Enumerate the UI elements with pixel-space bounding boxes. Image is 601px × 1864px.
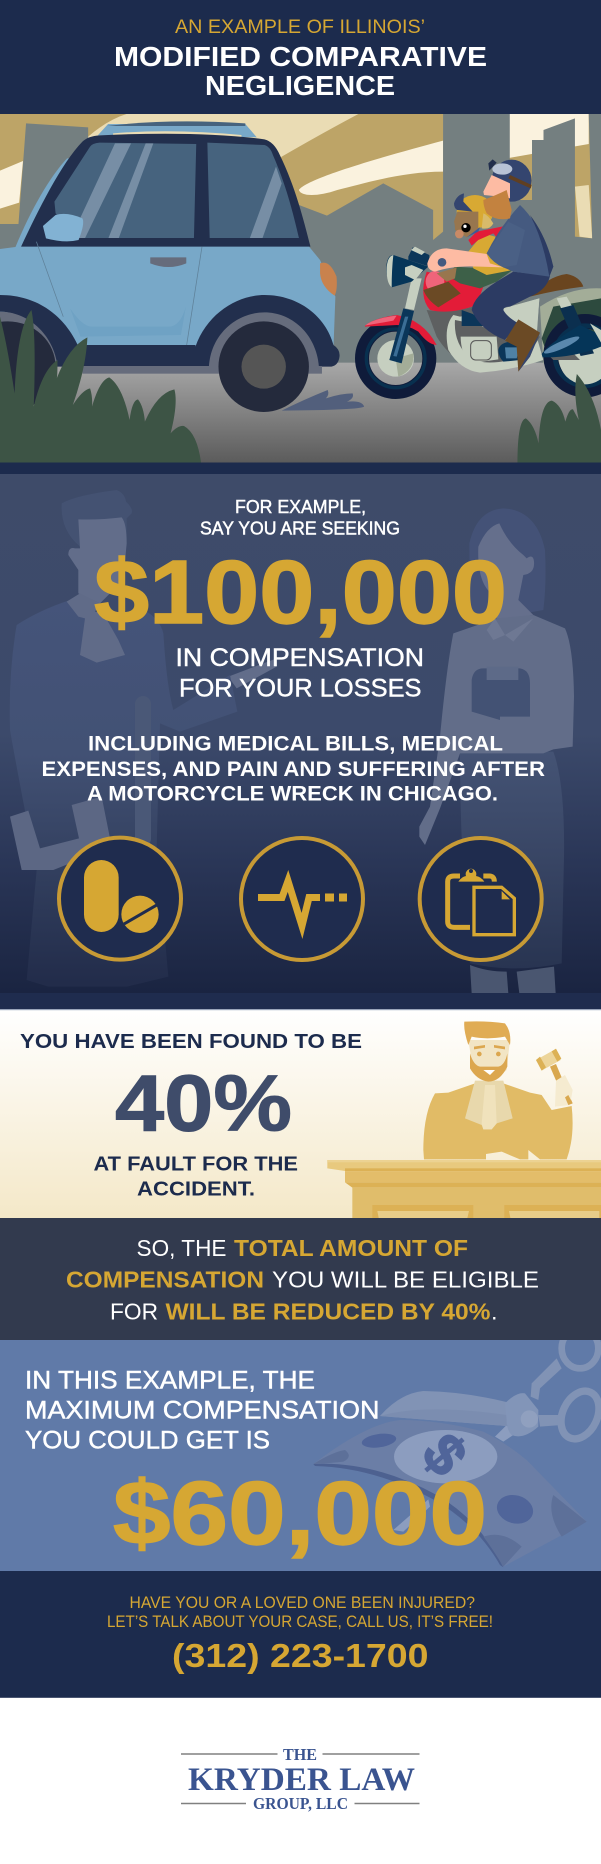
amount: $60,000	[113, 1464, 487, 1564]
reduction line 1: SO, THE	[136, 1235, 226, 1261]
bush right	[517, 374, 601, 464]
fault text top: YOU HAVE BEEN FOUND TO BE	[20, 1030, 362, 1053]
city background and road	[0, 114, 601, 463]
panel: compensation example	[0, 474, 601, 993]
header kicker: AN EXAMPLE OF ILLINOIS’	[175, 17, 425, 38]
icon: scissors cutting banknote	[313, 1328, 601, 1567]
judge illustration	[327, 1021, 601, 1221]
puddle	[282, 390, 364, 411]
icon: pulse	[241, 838, 363, 960]
motorcycle and riders	[362, 159, 601, 392]
details line 2: EXPENSES, AND PAIN AND SUFFERING AFTER	[42, 758, 545, 781]
panel: header	[0, 0, 601, 115]
icon: documents	[420, 838, 542, 960]
reduction line 2	[66, 1266, 539, 1292]
reduction line 1	[136, 1235, 468, 1261]
bush left	[0, 310, 201, 464]
logo rules	[181, 1754, 420, 1804]
logo: kryder law: KRYDER LAW	[188, 1762, 415, 1798]
panel: fault percentage	[0, 1009, 601, 1221]
amount: $100,000	[94, 543, 507, 643]
banknote dollar sign: $	[409, 1421, 480, 1488]
reduction line 1: TOTAL AMOUNT OF	[234, 1235, 468, 1261]
logo: group llc: GROUP, LLC	[253, 1794, 348, 1813]
car	[0, 121, 340, 412]
panel: maximum compensation	[0, 1328, 601, 1571]
reduction line 3: WILL BE REDUCED BY 40%	[166, 1298, 491, 1324]
cta line 2: LET’S TALK ABOUT YOUR CASE, CALL US, IT’S FREE!	[107, 1613, 493, 1631]
reduction line 2: COMPENSATION	[66, 1266, 264, 1292]
max text line 2: MAXIMUM COMPENSATION	[25, 1396, 379, 1424]
fault text line 2: ACCIDENT.	[137, 1178, 255, 1200]
panel: call to action	[0, 1571, 601, 1697]
reduction line 3: FOR	[110, 1298, 158, 1324]
intro text line 2: SAY YOU ARE SEEKING	[200, 518, 400, 538]
percentage: 40%	[115, 1058, 292, 1148]
cta line 1: HAVE YOU OR A LOVED ONE BEEN INJURED?	[130, 1594, 475, 1612]
compensation line 2: FOR YOUR LOSSES	[179, 674, 422, 702]
phone number: (312) 223-1700	[172, 1637, 428, 1674]
panel: road scene illustration	[0, 114, 601, 464]
reduction line 2: YOU WILL BE ELIGIBLE	[272, 1266, 539, 1292]
divider band	[0, 993, 601, 1010]
panel: logo footer	[0, 1697, 601, 1864]
medical professional silhouette	[419, 508, 574, 993]
max text line 1: IN THIS EXAMPLE, THE	[25, 1366, 315, 1394]
title line 2: NEGLIGENCE	[205, 70, 395, 101]
title line 1: MODIFIED COMPARATIVE	[114, 41, 487, 72]
judge bench	[327, 1160, 601, 1221]
icon: pills	[59, 838, 181, 960]
details line 3: A MOTORCYCLE WRECK IN CHICAGO.	[87, 782, 498, 806]
compensation line 1: IN COMPENSATION	[176, 644, 424, 672]
panel: reduction statement	[0, 1218, 601, 1340]
intro text: FOR EXAMPLE,	[235, 497, 366, 517]
reduction line 3: .	[491, 1298, 498, 1324]
lawyer silhouette	[10, 490, 277, 987]
max text line 3: YOU COULD GET IS	[25, 1426, 270, 1454]
logo: the: THE	[283, 1745, 317, 1764]
details line 1: INCLUDING MEDICAL BILLS, MEDICAL	[88, 732, 503, 756]
divider band	[0, 462, 601, 474]
fault text line 1: AT FAULT FOR THE	[94, 1152, 298, 1176]
